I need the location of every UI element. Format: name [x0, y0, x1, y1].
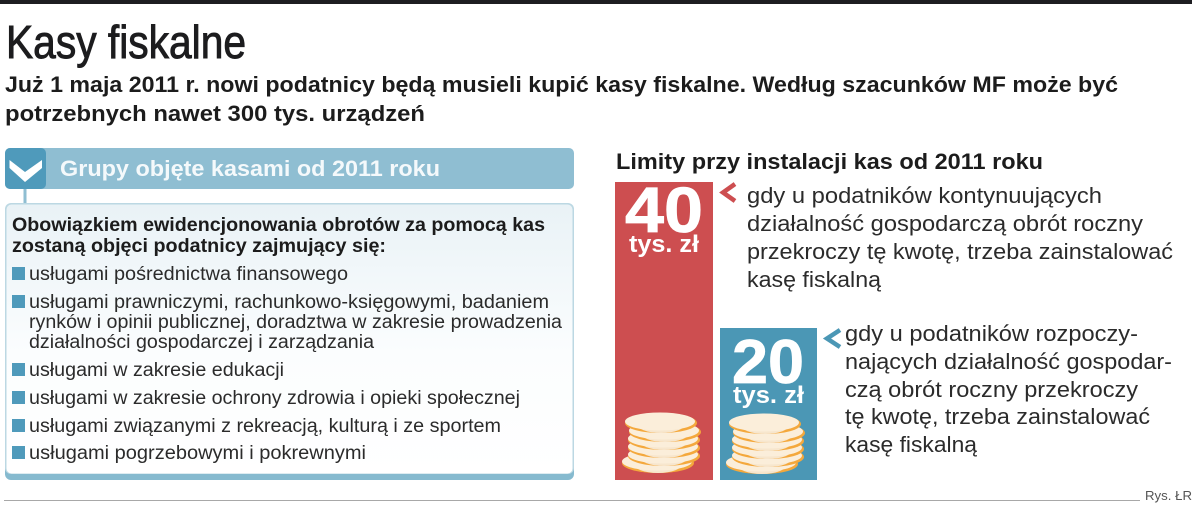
- intro text: Obowiązkiem ewidencjonowania obrotów za pomocą kas: [12, 215, 545, 236]
- bar: 40 tys. zł: [615, 174, 713, 480]
- subtitle: [5, 72, 1118, 126]
- text: 40 tys. limit: przekroczy tę kwotę, trzeba zainstalować: [747, 239, 1173, 264]
- bar: 20 tys. zł: [720, 328, 817, 480]
- text: 20 tys. limit: tę kwotę, trzeba zainstalować: [845, 404, 1150, 429]
- subtitle: Już 1 maja 2011 r. nowi podatnicy będą musieli kupić kasy fiskalne. Według szacunków MF może być: [5, 72, 1118, 97]
- panel heading: Grupy objęte kasami od 2011 roku: [60, 156, 440, 181]
- credit: Rys. ŁR: [1145, 488, 1192, 503]
- icon: red chevron: [723, 184, 735, 201]
- text: 20 tys. limit: [845, 321, 1172, 457]
- icon: coins: [726, 414, 805, 474]
- list: działalności gospodarczej i zarządzania: [29, 332, 374, 353]
- panel body: [5, 203, 574, 480]
- icon: blue chevron: [827, 330, 840, 347]
- list: [12, 264, 562, 464]
- icon: coins: [622, 412, 701, 473]
- panel: grupy objęte kasami: [5, 148, 574, 480]
- text: 20 tys. limit: nających działalność gospodar-: [845, 349, 1172, 374]
- list: usługami pogrzebowymi i pokrewnymi: [29, 443, 366, 464]
- bar: 40 tys. zł: tys. zł: [629, 231, 699, 258]
- text: 20 tys. limit: gdy u podatników rozpoczy-: [845, 321, 1138, 346]
- text: 20 tys. limit: kasę fiskalną: [845, 432, 978, 457]
- top rule: [0, 0, 1192, 4]
- panel body: zostaną objęci podatnicy zajmujący się:: [12, 236, 386, 257]
- list: usługami w zakresie ochrony zdrowia i opieki społecznej: [29, 388, 520, 409]
- bar: 20 tys. zł: 20: [732, 328, 804, 397]
- heading: limity: Limity przy instalacji kas od 2011 roku: [616, 149, 1043, 174]
- title: Kasy fiskalne: [6, 16, 246, 68]
- text: 20 tys. limit: czą obrót roczny przekroczy: [845, 377, 1138, 402]
- text: 40 tys. limit: kasę fiskalną: [747, 267, 882, 292]
- panel header bar: [5, 148, 574, 189]
- text: 40 tys. limit: gdy u podatników kontynuujących: [747, 183, 1102, 208]
- text: 40 tys. limit: [747, 183, 1173, 292]
- list: usługami pośrednictwa finansowego: [29, 264, 348, 285]
- list: usługami prawniczymi, rachunkowo-księgowymi, badaniem: [29, 292, 549, 313]
- bottom rule: [4, 500, 1140, 501]
- text: 40 tys. limit: działalność gospodarczą obrót roczny: [747, 211, 1143, 236]
- list: usługami związanymi z rekreacją, kulturą i ze sportem: [29, 416, 501, 437]
- list: usługami w zakresie edukacji: [29, 360, 284, 381]
- bar: 20 tys. zł: tys. zł: [733, 382, 804, 409]
- list: rynków i opinii publicznej, doradztwa w zakresie prowadzenia: [29, 312, 562, 333]
- subtitle: potrzebnych nawet 300 tys. urządzeń: [5, 101, 425, 126]
- icon: chevron down: [5, 148, 46, 189]
- bar: 40 tys. zł: 40: [625, 174, 703, 246]
